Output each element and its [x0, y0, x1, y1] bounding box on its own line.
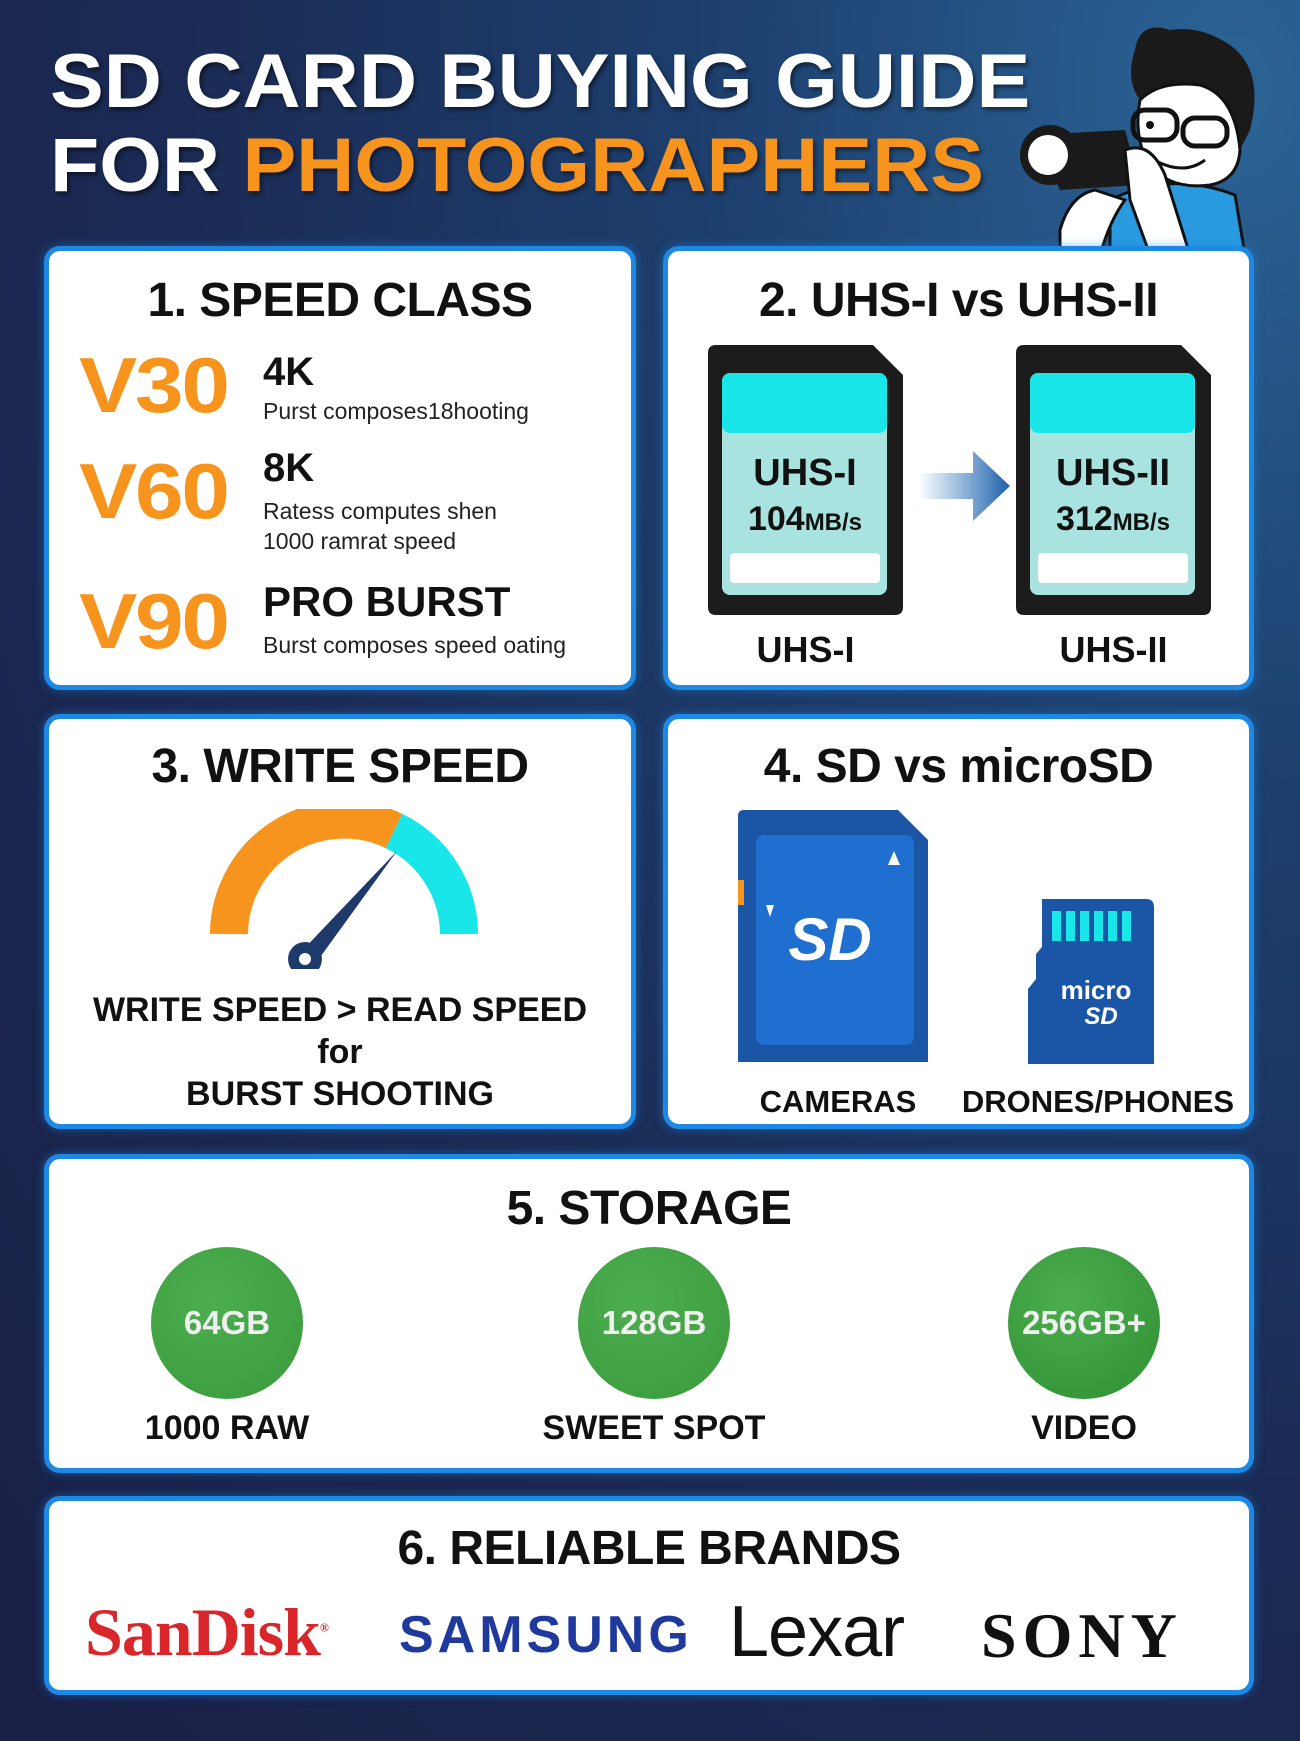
V30 row: 4K [263, 350, 314, 394]
logo: SanDisk: SanDisk® [85, 1594, 328, 1670]
V90 row [79, 577, 566, 665]
V90 row: Burst composes speed oating [263, 632, 566, 658]
title: SD CARD BUYING GUIDE [50, 39, 1030, 124]
storage: 128GB: 128GB [602, 1304, 706, 1341]
storage: 64GB: 1000 RAW [145, 1409, 309, 1447]
heading: 4. SD vs microSD [764, 740, 1153, 793]
title [50, 39, 1032, 208]
icon: UHS-I card: 104MB/s [748, 500, 862, 538]
storage: 128GB: SWEET SPOT [543, 1409, 765, 1447]
icon: microSD card [1028, 899, 1154, 1064]
text block [93, 991, 587, 1113]
V30 row [79, 341, 529, 429]
icon: UHS-II card: 312MB/s [1056, 500, 1170, 538]
storage: 256GB+: 256GB+ [1022, 1304, 1146, 1341]
V90 row: V90 [79, 577, 228, 665]
storage: 256GB+ [1008, 1247, 1160, 1447]
icon: UHS-II card [1016, 345, 1211, 615]
storage: 256GB+: VIDEO [1031, 1409, 1137, 1447]
storage: 128GB [543, 1247, 766, 1447]
icon: SD card [738, 810, 928, 1062]
label: UHS-I: UHS-I [756, 629, 854, 670]
storage: 64GB [145, 1247, 310, 1447]
panel: 1. speed class [44, 246, 636, 690]
panel: 2. UHS-I vs UHS-II [663, 246, 1254, 690]
icon: microSD card: micro [1061, 975, 1131, 1005]
text block: for [317, 1033, 363, 1071]
title: FOR PHOTOGRAPHERS [50, 123, 984, 208]
panel: 3. write speed [44, 714, 636, 1129]
label: cameras: CAMERAS [760, 1084, 916, 1119]
V90 row: PRO BURST [263, 578, 510, 625]
panel: 5. storage [44, 1154, 1254, 1473]
label: UHS-II: UHS-II [1060, 629, 1168, 670]
icon: speedometer [210, 809, 478, 969]
icon: UHS-I card: UHS-I [753, 452, 857, 494]
heading: 1. SPEED CLASS [147, 274, 533, 327]
icon: SD card: SD [788, 906, 872, 973]
V30 row: V30 [79, 341, 228, 429]
V30 row: Purst composes18hooting [263, 398, 529, 424]
V60 row: 8K [263, 446, 314, 490]
panel: 6. reliable brands [44, 1496, 1254, 1695]
illustration: photographer character [1020, 28, 1254, 248]
arrow [922, 451, 1010, 521]
heading: 2. UHS-I vs UHS-II [759, 274, 1158, 327]
heading: 6. RELIABLE BRANDS [397, 1522, 901, 1575]
text block: WRITE SPEED > READ SPEED [93, 991, 587, 1029]
label: drones/phones: DRONES/PHONES [962, 1084, 1234, 1119]
V60 row: V60 [79, 447, 228, 535]
logo: Lexar: Lexar [729, 1592, 904, 1672]
icon: UHS-II card: UHS-II [1056, 452, 1170, 494]
logo: Samsung: SAMSUNG [399, 1606, 693, 1664]
V60 row: Ratess computes shen [263, 498, 497, 524]
icon: UHS-I card [708, 345, 903, 615]
panel: 4. SD vs microSD [663, 714, 1254, 1129]
heading: 5. STORAGE [507, 1182, 791, 1235]
logo: Sony: SONY [981, 1600, 1183, 1671]
storage: 64GB: 64GB [184, 1304, 270, 1341]
V60 row [79, 446, 497, 554]
icon: microSD card: SD [1084, 1003, 1118, 1030]
V60 row: 1000 ramrat speed [263, 528, 456, 554]
heading: 3. WRITE SPEED [151, 740, 529, 793]
text block: BURST SHOOTING [186, 1075, 494, 1113]
